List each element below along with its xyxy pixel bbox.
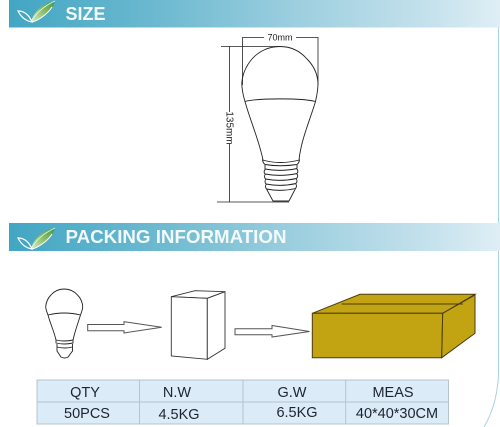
column: gross weight: 6.5KG	[276, 405, 318, 421]
column: net weight: 4.5KG	[158, 407, 200, 423]
header: size	[9, 0, 500, 28]
column: qty: 50PCS	[64, 406, 110, 422]
column: net weight	[158, 385, 200, 423]
column: qty: QTY	[70, 385, 100, 401]
icon: inner box	[171, 291, 225, 359]
column: gross weight: G.W	[278, 385, 307, 401]
heading: packing information: PACKING INFORMATION	[66, 227, 286, 247]
column: measurements: 40*40*30CM	[356, 406, 438, 422]
page edge line	[484, 0, 498, 427]
banner: packing information	[9, 223, 500, 251]
icon: leaf	[18, 1, 55, 22]
icon: carton	[312, 294, 475, 358]
table: packing data	[37, 380, 448, 424]
bulb outline	[242, 46, 318, 201]
height dimension: 135mm	[224, 111, 235, 145]
heading: size: SIZE	[66, 4, 106, 24]
height dimension	[217, 46, 289, 202]
width dimension: 70mm	[267, 32, 293, 42]
column: measurements: MEAS	[372, 385, 414, 401]
diagram: bulb dimensions	[217, 32, 318, 202]
column: gross weight	[276, 385, 318, 421]
banner: size	[9, 0, 500, 28]
column: net weight: N.W	[163, 385, 191, 401]
header: packing information	[9, 223, 500, 251]
arrow: box to carton	[235, 326, 310, 337]
arrow: bulb to box	[88, 322, 162, 333]
column: measurements	[356, 385, 438, 422]
icon: small bulb	[46, 289, 83, 358]
icon: leaf	[18, 228, 55, 249]
column: qty	[64, 385, 110, 422]
width dimension	[242, 32, 318, 85]
